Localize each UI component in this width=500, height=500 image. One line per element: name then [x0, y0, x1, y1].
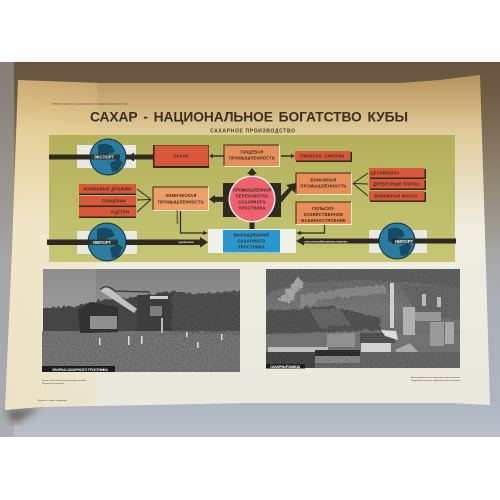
title: САХАР - НАЦИОНАЛЬНОЕ БОГАТСТВО КУБЫ	[90, 110, 408, 124]
box: chemical industry: ПРОМЫШЛЕННОСТЬ	[158, 200, 204, 204]
box: sugar: САХАР	[173, 154, 189, 158]
import zone: bottom left globe: ИМПОРТ	[93, 240, 111, 245]
arrow: circle to paper industry	[279, 183, 296, 203]
chemical products list: АЦЕТОН	[111, 210, 129, 214]
box: glucose and syrups: ГЛЮКОЗА, СИРОПЫ	[300, 154, 344, 158]
box: agricultural machinery: ХОЗЯЙСТВЕННОЕ	[304, 212, 343, 217]
box: chemical industry	[153, 187, 209, 211]
arrow: circle up to food industry	[247, 168, 257, 181]
publication notes under photos: Тираж и заказ издания	[37, 400, 67, 402]
box: agricultural machinery: СЕЛЬСКО-	[312, 206, 335, 211]
central dark connector block	[223, 183, 281, 217]
box: paper industry: БУМАЖНАЯ	[311, 178, 336, 182]
paper products list	[369, 168, 426, 202]
box: paper industry: ПРОМЫШЛЕННОСТЬ	[300, 184, 347, 188]
arrow: machinery to cane growing	[296, 225, 324, 235]
arrow: chemical industry fertilizers to cane growing	[175, 210, 208, 235]
publication notes under photos: Авторы: издательство учебных наглядных пособий	[42, 379, 87, 382]
arrows: paper industry to products	[353, 173, 368, 196]
arrow: food industry to glucose	[281, 154, 295, 158]
box: sugar cane growing: ВЫРАЩИВАНИЕ	[234, 232, 270, 238]
white area behind cane growing	[208, 229, 296, 253]
factory buildings	[267, 294, 454, 363]
box: agricultural machinery	[296, 202, 352, 225]
circle: industrial processing of sugar cane: ПЕРЕРАБОТКА	[236, 194, 268, 198]
harvester machine	[78, 286, 170, 333]
arrow: circle to chemical industry	[209, 195, 224, 204]
box: sugar cane growing: САХАРНОГО	[238, 238, 266, 244]
photo caption: САХАРНЫЙ ЗАВОД	[270, 365, 300, 369]
import zone: bottom right globe: сельскохозяйственные машины	[304, 239, 348, 243]
paper products list: ЦЕЛЛЮЛОЗА	[371, 170, 399, 176]
chimney	[390, 283, 394, 328]
box: agricultural machinery: МАШИНОСТРОЕНИЕ	[301, 218, 346, 223]
photo caption	[42, 366, 115, 372]
poster sheet	[5, 75, 490, 410]
arrow: food industry to sugar	[209, 154, 224, 158]
chemical products list	[79, 184, 136, 218]
circle: industrial processing of sugar cane: ПРОМЫШЛЕННАЯ	[233, 188, 271, 192]
export zone: top left globe: ЭКСПОРТ	[94, 154, 114, 160]
box: glucose and syrups	[295, 151, 352, 162]
arrow: cane growing up to circle	[247, 212, 257, 230]
subtitle: САХАРНОЕ ПРОИЗВОДСТВО	[210, 128, 295, 134]
import zone: bottom right globe	[296, 223, 456, 259]
box: food industry: ПРОМЫШЛЕННОСТЬ	[229, 156, 275, 160]
circle: industrial processing of sugar cane: ТРОСТНИКА	[239, 206, 265, 210]
chemical products list: ГЛИЦЕРИН	[102, 198, 126, 204]
panel: production flow diagram	[47, 135, 456, 262]
box: sugar cane growing: ТРОСТНИКА	[238, 244, 265, 250]
arrow: chemical industry fertilizers to cane growing: удобрения	[175, 210, 179, 224]
wall background behind poster	[0, 62, 500, 437]
chemical products list: КОРМОВЫЕ ДРОЖЖИ	[84, 186, 131, 192]
photo: sugar factory	[266, 269, 460, 369]
circle: industrial processing of sugar cane	[228, 176, 276, 222]
small print line at top: Учебное пособие по экономической географии зарубежных стран	[52, 102, 129, 106]
publication notes under photos: Редактор плаката	[42, 383, 65, 385]
paper products list: ДРЕВЕСНЫЕ ПЛИТЫ	[373, 182, 419, 186]
photo: sugar cane harvesting	[42, 269, 240, 372]
import zone: bottom right globe: ИМПОРТ	[395, 239, 413, 244]
import zone: bottom left globe	[47, 223, 208, 261]
circle: industrial processing of sugar cane: САХАРНОГО	[238, 200, 266, 204]
box: sugar cane growing	[223, 230, 280, 252]
publication notes under photos: Художественное оформление плаката	[411, 379, 461, 382]
import zone: bottom left globe: удобрения	[178, 240, 194, 244]
paper products list: БУМАЖНАЯ МАССА	[374, 194, 418, 198]
box: food industry	[224, 145, 280, 167]
photo caption	[266, 364, 305, 369]
photo caption: УБОРКА САХАРНОГО ТРОСТНИКА	[52, 368, 108, 372]
box: chemical industry: ХИМИЧЕСКАЯ	[166, 193, 196, 198]
box: paper industry	[296, 173, 352, 195]
export zone: top left globe	[49, 139, 153, 175]
box: food industry: ПИЩЕВАЯ	[241, 150, 263, 154]
publication notes under photos	[37, 376, 461, 402]
arrows: chemical industry to products	[137, 189, 151, 212]
publication notes under photos: Фотографии из материалов издательства	[411, 376, 461, 379]
box: sugar	[153, 145, 209, 168]
